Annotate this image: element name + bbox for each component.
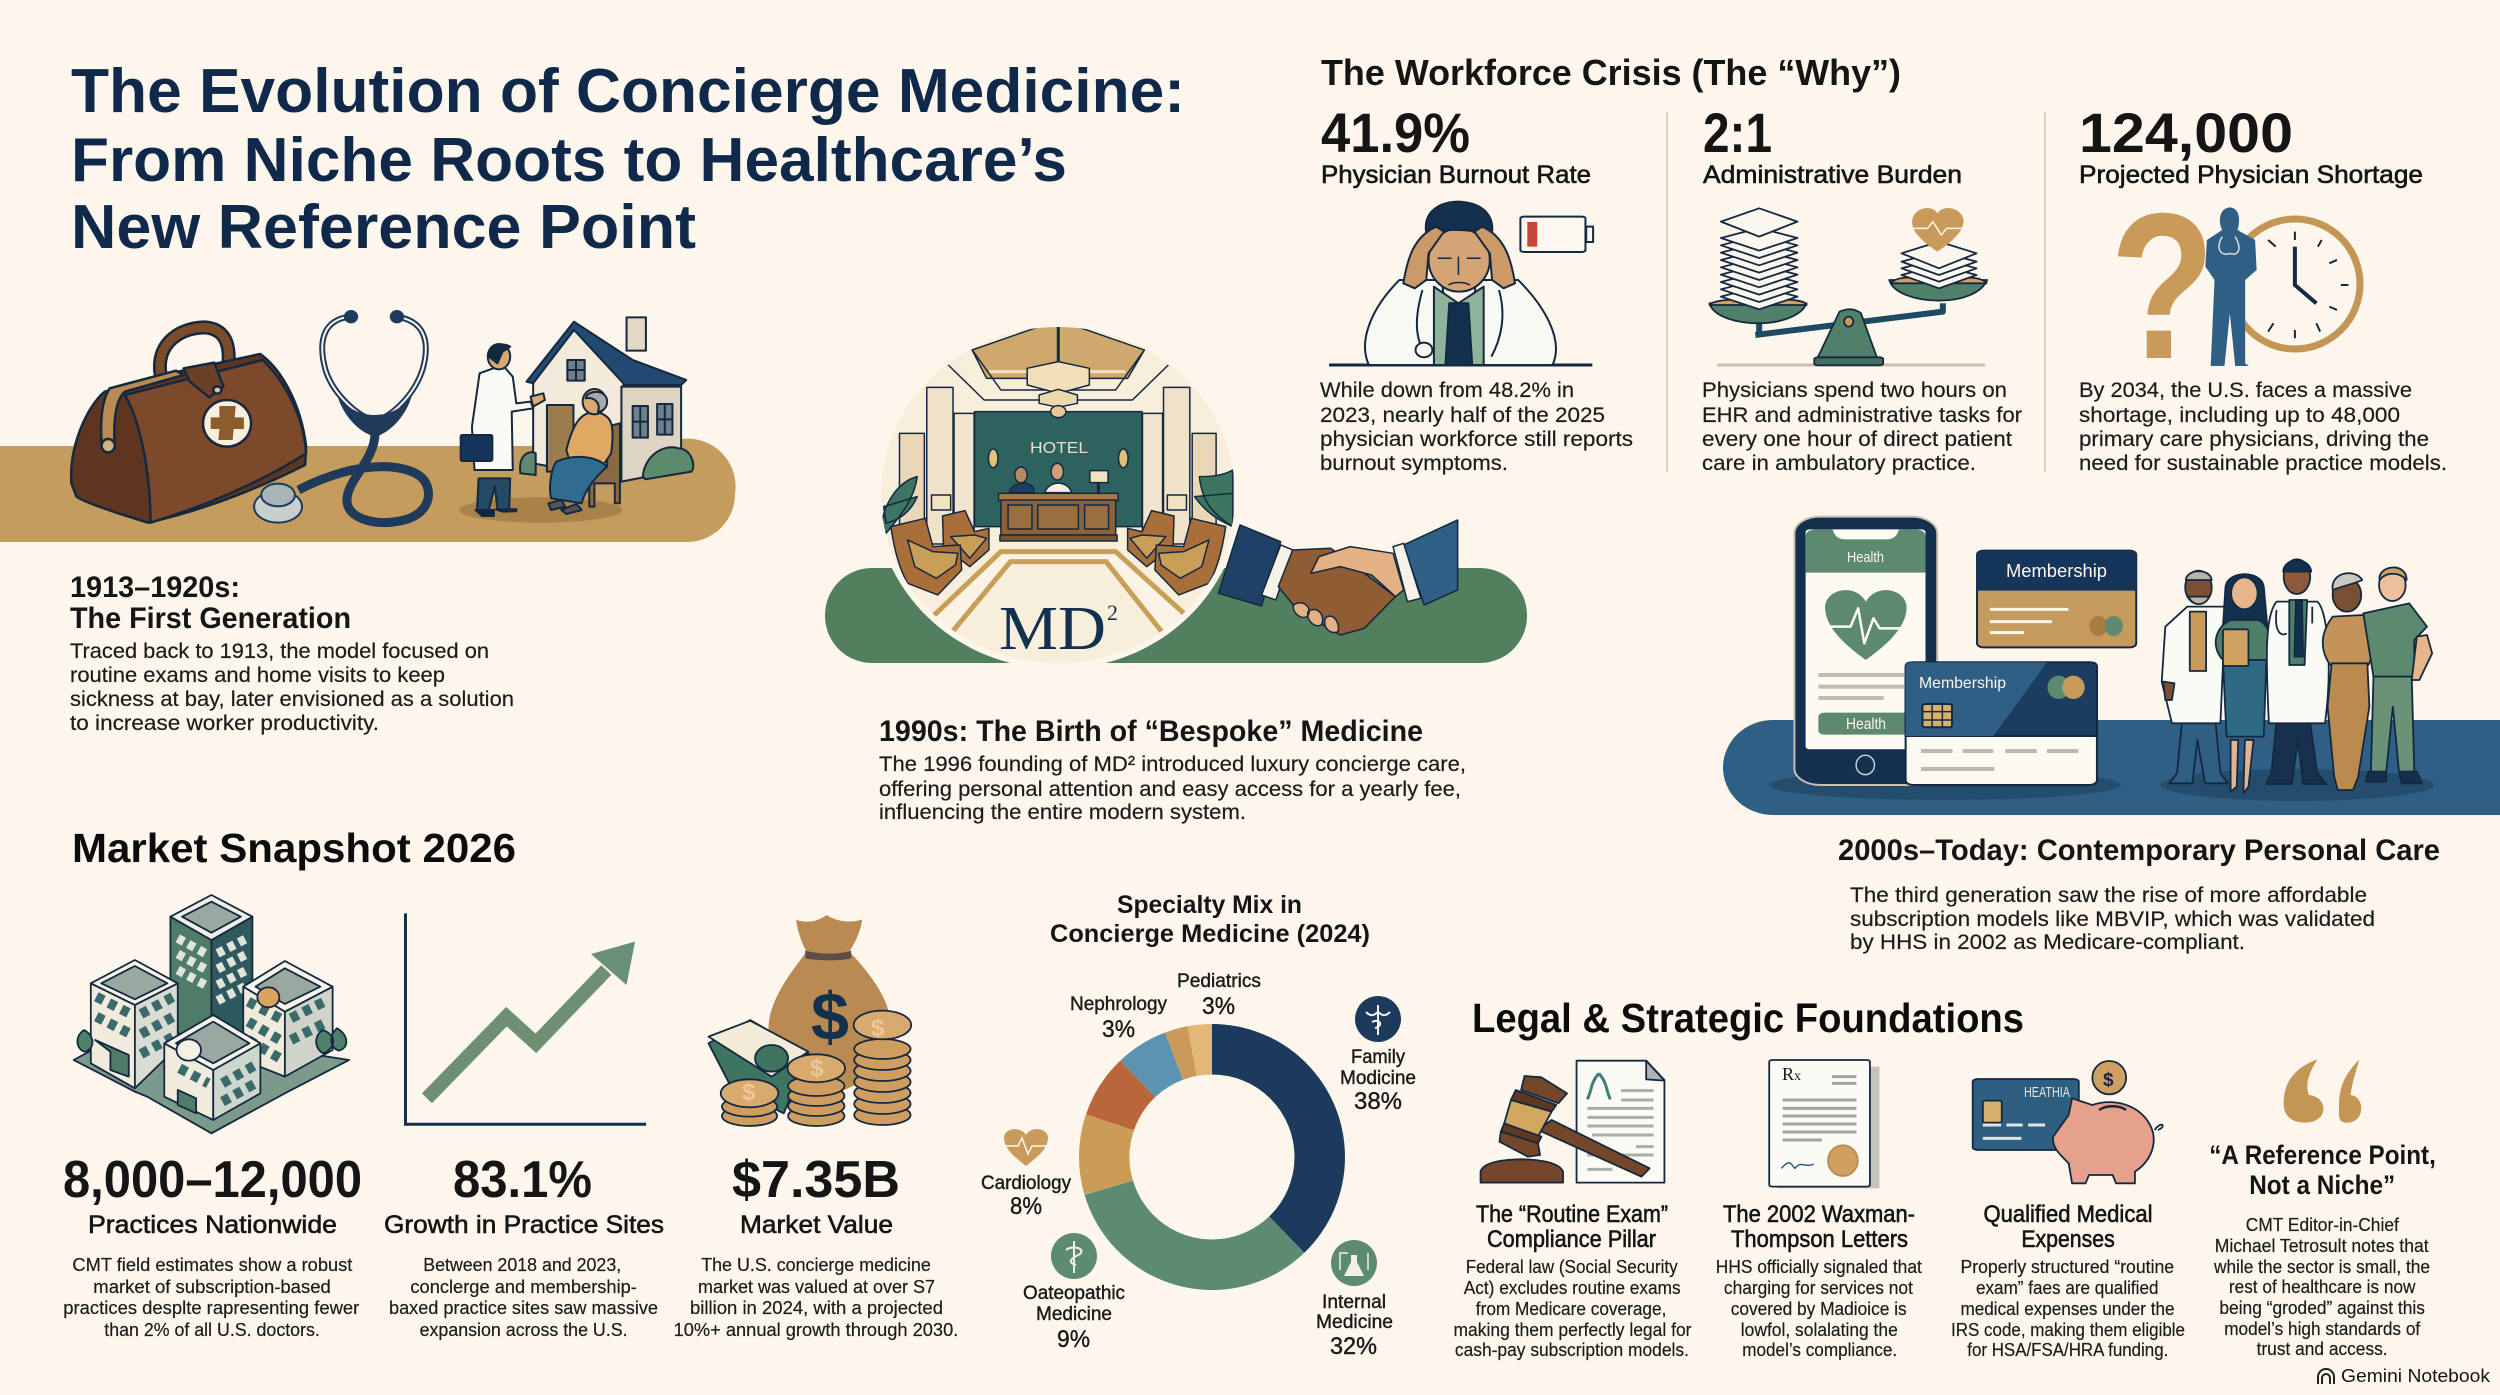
icon: money bag with coins: $ — [811, 979, 849, 1055]
callout: a reference point — [2209, 1140, 2436, 1359]
label: internal medicine with flask icon — [1316, 1240, 1393, 1360]
label: pediatrics: Pediatrics — [1177, 971, 1261, 992]
text block: contemporary care: by HHS in 2002 as Medicare-compliant. — [1850, 930, 2245, 954]
text block: contemporary care: subscription models like MBVIP, which was validated — [1850, 907, 2375, 931]
stat: waxman-thompson letters: covered by Madioice is — [1731, 1298, 1907, 1319]
label: internal medicine with flask icon: 32% — [1330, 1333, 1377, 1360]
icon: gold membership card: Membership — [2006, 561, 2107, 581]
callout: a reference point: Michael Tetrosult notes that — [2215, 1235, 2429, 1256]
label: osteopathic medicine with staff icon: 9% — [1057, 1326, 1090, 1353]
callout: a reference point: trust and access. — [2257, 1338, 2388, 1359]
text block: bespoke medicine: offering personal attention and easy access for a yearly fee, — [879, 777, 1461, 801]
illustration: phone app: Health — [1847, 549, 1884, 566]
stat: burnout rate: 41.9% — [1321, 101, 1470, 164]
stat: routine exam pillar: making them perfectly legal for — [1454, 1319, 1692, 1340]
text block: contemporary care: The third generation saw the rise of more affordable — [1850, 883, 2367, 907]
callout: a reference point: being “groded” against this — [2219, 1297, 2425, 1318]
stat: burnout rate: 2023, nearly half of the 2025 — [1320, 403, 1605, 427]
stat: qualified medical expenses: Qualified Medical — [1984, 1201, 2152, 1228]
stat: waxman-thompson letters: charging for services not — [1724, 1277, 1913, 1298]
illustration: hotel lobby: HOTEL — [1030, 440, 1088, 457]
stat: routine exam pillar — [1454, 1201, 1692, 1360]
icon: stethoscope — [254, 310, 428, 523]
stat: qualified medical expenses: for HSA/FSA/HRA funding. — [1967, 1339, 2168, 1360]
panel: first generation band — [0, 439, 736, 542]
stat: burnout rate: Physician Burnout Rate — [1321, 161, 1591, 189]
icon: money bag with coins: $ — [810, 1055, 824, 1082]
stat: physician shortage: Projected Physician Shortage — [2079, 161, 2423, 189]
label: cardiology with heart icon: Cardiology — [981, 1173, 1071, 1194]
icon: signed letter: Rx — [1782, 1064, 1801, 1084]
text block: contemporary care — [1838, 834, 2440, 954]
icon: navy membership card: Membership — [1919, 675, 2006, 692]
stat: waxman-thompson letters: The 2002 Waxman- — [1723, 1201, 1915, 1228]
text block: first generation: routine exams and home visits to keep — [70, 663, 445, 687]
stat: physician shortage: By 2034, the U.S. faces a massive — [2079, 378, 2412, 402]
stat: administrative burden: 2:1 — [1703, 101, 1772, 164]
heading: workforce crisis: The Workforce Crisis (The “Why”) — [1321, 52, 1901, 93]
heading: legal and strategic foundations: Legal & Strategic Foundations — [1472, 995, 2024, 1041]
stat: market value — [674, 1151, 958, 1340]
stat: practices nationwide — [63, 1151, 362, 1340]
illustration: hotel lobby: 2 — [1107, 600, 1118, 625]
icon: money bag with coins: $ — [742, 1079, 756, 1106]
chart heading: specialty mix: Concierge Medicine (2024) — [1050, 920, 1370, 948]
stat: market value: billion in 2024, with a projected — [690, 1297, 943, 1318]
stat: practices nationwide: market of subscription-based — [93, 1276, 331, 1297]
stat: qualified medical expenses: IRS code, making them eligible — [1951, 1319, 2185, 1340]
text block: first generation: sickness at bay, later envisioned as a solution — [70, 687, 514, 711]
icon: gavel and document — [1481, 1061, 1664, 1183]
panel: contemporary care band — [1723, 720, 2500, 815]
illustration: care team — [2160, 559, 2434, 801]
icon: money bag with coins — [709, 915, 911, 1126]
stat: practices nationwide: 8,000–12,000 — [63, 1151, 362, 1209]
label: family medicine with caduceus icon — [1340, 996, 1416, 1115]
icon: quote marks — [2284, 1059, 2361, 1123]
callout: a reference point: model’s high standards of — [2224, 1318, 2421, 1339]
stat: waxman-thompson letters: HHS officially signaled that — [1716, 1256, 1922, 1277]
illustration: house call — [459, 317, 693, 523]
stat: routine exam pillar: Compliance Pillar — [1487, 1226, 1656, 1253]
label: pediatrics: 3% — [1202, 993, 1235, 1020]
stat: practices nationwide: Practices Nationwide — [88, 1211, 337, 1239]
callout: a reference point: “A Reference Point, — [2209, 1140, 2436, 1170]
stat: administrative burden — [1702, 101, 2022, 475]
stat: physician shortage — [2079, 101, 2447, 475]
stat: growth in practice sites: baxed practice sites saw massive — [389, 1297, 658, 1318]
title — [71, 57, 1185, 262]
text block: bespoke medicine — [879, 715, 1466, 824]
text block: bespoke medicine: The 1996 founding of MD² introduced luxury concierge care, — [879, 752, 1466, 776]
stat: practices nationwide: CMT field estimates show a robust — [72, 1254, 352, 1275]
callout: a reference point: rest of healthcare is now — [2229, 1276, 2416, 1297]
stat: qualified medical expenses: Properly structured “routine — [1960, 1256, 2174, 1277]
stat: qualified medical expenses: Expenses — [2021, 1226, 2115, 1253]
label: nephrology: Nephrology — [1070, 994, 1167, 1015]
text block: bespoke medicine: influencing the entire modern system. — [879, 800, 1246, 824]
icon: handshake — [1219, 520, 1458, 635]
stat: burnout rate: While down from 48.2% in — [1320, 378, 1574, 402]
label: internal medicine with flask icon: Medicine — [1316, 1312, 1393, 1333]
title: From Niche Roots to Healthcare’s — [71, 126, 1067, 195]
text block: contemporary care: 2000s–Today: Contemporary Personal Care — [1838, 834, 2440, 867]
stat: qualified medical expenses: exam” faes are qualified — [1976, 1277, 2158, 1298]
label: nephrology — [1070, 994, 1167, 1043]
stat: physician shortage: need for sustainable practice models. — [2079, 451, 2447, 475]
watermark: gemini notebook: Gemini Notebook — [2341, 1366, 2491, 1386]
chart heading: specialty mix: Specialty Mix in — [1117, 891, 1302, 919]
icon: gold membership card — [1977, 551, 2136, 647]
stat: practices nationwide: than 2% of all U.S. doctors. — [104, 1319, 320, 1340]
illustration: doctor bag — [71, 327, 306, 523]
title: The Evolution of Concierge Medicine: — [71, 57, 1185, 126]
stat: market value: $7.35B — [732, 1151, 900, 1209]
icon: burned out doctor — [1329, 202, 1593, 365]
icon: health card and piggy bank: $ — [2103, 1070, 2114, 1091]
text block: first generation — [70, 571, 514, 735]
icon: question mark, doctor silhouette and clock — [2110, 171, 2360, 403]
label: cardiology with heart icon: 8% — [1010, 1193, 1042, 1220]
text block: bespoke medicine: 1990s: The Birth of “Bespoke” Medicine — [879, 715, 1423, 748]
stat: practices nationwide: practices desplte rapresenting fewer — [63, 1297, 359, 1318]
text block: first generation: Traced back to 1913, the model focused on — [70, 639, 489, 663]
icon: health card and piggy bank: HEATHIA — [2024, 1084, 2070, 1101]
icon: money bag with coins: $ — [871, 1015, 885, 1042]
stat: physician shortage: 124,000 — [2079, 101, 2293, 164]
stat: waxman-thompson letters: Thompson Letters — [1731, 1226, 1908, 1253]
title: New Reference Point — [71, 193, 696, 262]
stat: administrative burden: every one hour of direct patient — [1702, 427, 2012, 451]
icon: question mark, doctor silhouette and clock: ? — [2110, 171, 2215, 403]
heading: market snapshot: Market Snapshot 2026 — [72, 825, 516, 871]
stat: administrative burden: care in ambulatory practice. — [1702, 451, 1976, 475]
callout: a reference point: while the sector is small, the — [2213, 1256, 2430, 1277]
stat: market value: 10%+ annual growth through 2030. — [674, 1319, 958, 1340]
text block: first generation: The First Generation — [70, 602, 351, 635]
icon: health card and piggy bank — [1973, 1061, 2163, 1183]
stat: qualified medical expenses — [1951, 1201, 2185, 1360]
label: nephrology: 3% — [1102, 1016, 1135, 1043]
stat: physician shortage: primary care physicians, driving the — [2079, 427, 2429, 451]
icon: signed letter — [1769, 1060, 1879, 1188]
stat: waxman-thompson letters: lowfol, solalating the — [1741, 1319, 1898, 1340]
text block: first generation: to increase worker productivity. — [70, 711, 379, 735]
label: osteopathic medicine with staff icon: Oateopathic — [1023, 1283, 1125, 1304]
label: family medicine with caduceus icon: Modicine — [1340, 1068, 1416, 1089]
stat: waxman-thompson letters: model’s compliance. — [1742, 1339, 1897, 1360]
stat: market value: Market Value — [740, 1211, 893, 1239]
panel: bespoke band — [825, 568, 1527, 663]
illustration: hotel lobby: MD — [999, 595, 1106, 663]
stat: growth in practice sites: expansion across the U.S. — [420, 1319, 628, 1340]
stat: burnout rate — [1320, 101, 1633, 475]
illustration: phone app — [1769, 517, 2121, 800]
stat: growth in practice sites: 83.1% — [453, 1151, 592, 1209]
label: osteopathic medicine with staff icon — [1023, 1233, 1125, 1353]
chart: specialty donut — [1060, 1005, 1364, 1309]
stat: administrative burden: EHR and administrative tasks for — [1702, 403, 2022, 427]
callout: a reference point: Not a Niche” — [2249, 1170, 2395, 1200]
stat: routine exam pillar: Federal law (Social Security — [1466, 1256, 1678, 1277]
stat: growth in practice sites: Between 2018 and 2023, — [423, 1254, 621, 1275]
stat: qualified medical expenses: medical expenses under the — [1960, 1298, 2174, 1319]
stat: waxman-thompson letters — [1716, 1201, 1922, 1360]
stat: growth in practice sites: Growth in Practice Sites — [384, 1211, 664, 1239]
label: family medicine with caduceus icon: Family — [1351, 1047, 1405, 1068]
stat: routine exam pillar: The “Routine Exam” — [1476, 1201, 1668, 1228]
stat: routine exam pillar: from Medicare coverage, — [1476, 1298, 1666, 1319]
stat: routine exam pillar: cash-pay subscription models. — [1455, 1339, 1689, 1360]
stat: market value: market was valued at over S7 — [698, 1276, 935, 1297]
stat: routine exam pillar: Act) excludes routine exams — [1464, 1277, 1681, 1298]
chart heading: specialty mix — [1050, 891, 1370, 948]
stat: administrative burden: Administrative Burden — [1703, 161, 1962, 189]
label: internal medicine with flask icon: Internal — [1322, 1292, 1386, 1313]
stat: physician shortage: shortage, including up to 48,000 — [2079, 403, 2400, 427]
stat: market value: The U.S. concierge medicine — [701, 1254, 931, 1275]
illustration: phone app: Health — [1846, 716, 1886, 733]
label: pediatrics — [1177, 971, 1261, 1020]
stat: growth in practice sites: conclerge and membership- — [410, 1276, 637, 1297]
icon: clinic buildings — [74, 895, 349, 1133]
text block: first generation: 1913–1920s: — [70, 571, 240, 604]
dividers — [1667, 112, 2045, 472]
icon: scale with paperwork and heart — [1709, 208, 1987, 365]
icon: navy membership card — [1906, 662, 2097, 785]
stat: administrative burden: Physicians spend two hours on — [1702, 378, 2007, 402]
illustration: hotel lobby — [872, 320, 1245, 669]
chart: growth arrow — [405, 913, 646, 1124]
label: osteopathic medicine with staff icon: Medicine — [1036, 1304, 1112, 1325]
stat: growth in practice sites — [384, 1151, 664, 1340]
stat: burnout rate: physician workforce still reports — [1320, 427, 1633, 451]
label: cardiology with heart icon — [981, 1129, 1071, 1220]
label: family medicine with caduceus icon: 38% — [1354, 1088, 1402, 1115]
stat: burnout rate: burnout symptoms. — [1320, 451, 1508, 475]
callout: a reference point: CMT Editor-in-Chief — [2246, 1214, 2400, 1235]
